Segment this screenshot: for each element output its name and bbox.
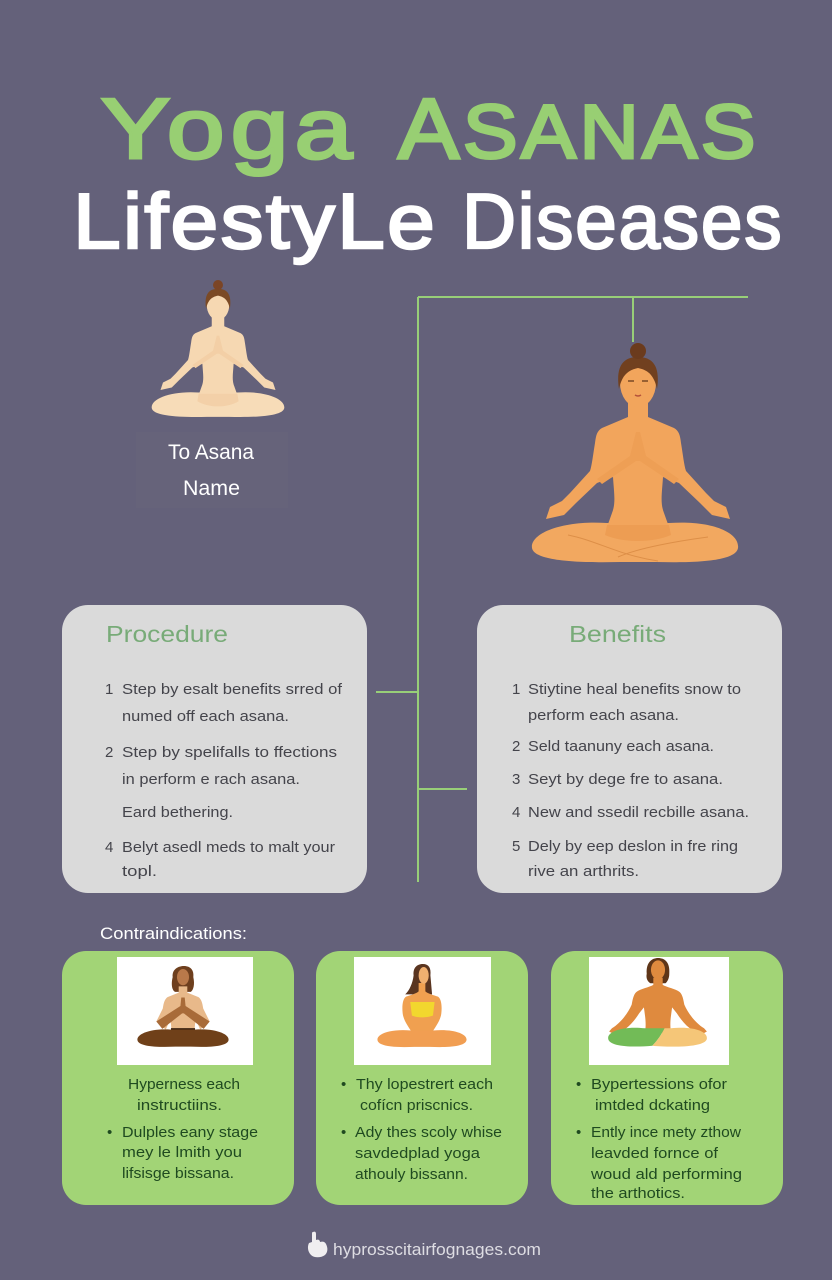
- icon: small seated yoga figure: [152, 280, 284, 417]
- card 2 text: Thy lopestrert each: [356, 1076, 493, 1093]
- procedure steps: Belyt asedl meds to malt your: [122, 839, 335, 856]
- card 1 text: Dulples eany stage: [122, 1124, 258, 1141]
- icon: figure with green leg: [608, 958, 707, 1047]
- benefits list: 3: [512, 771, 520, 788]
- procedure steps: 1: [105, 681, 113, 698]
- panel: contraindication card 1: [62, 951, 294, 1205]
- benefits list: perform each asana.: [528, 707, 679, 724]
- benefits list: Dely by eep deslon in fre ring: [528, 838, 738, 855]
- card 3 text: Ently ince mety zthow: [591, 1124, 741, 1141]
- procedure steps: numed off each asana.: [122, 708, 289, 725]
- card 3 text: •: [576, 1076, 581, 1093]
- icon: hand: [308, 1232, 327, 1257]
- connector lines: [376, 297, 748, 882]
- website url: hyprosscitairfognages.com: [333, 1240, 541, 1259]
- card 3 text: [576, 1076, 742, 1202]
- card 2 text: Ady thes scoly whise: [355, 1124, 502, 1141]
- benefits list: New and ssedil recbille asana.: [528, 804, 749, 821]
- card 3 text: •: [576, 1124, 581, 1141]
- heading: contraindications: Contraindications:: [100, 924, 247, 943]
- card 1 text: •: [107, 1124, 112, 1141]
- title: LifestyLe: [73, 179, 435, 265]
- card 2 text: •: [341, 1076, 346, 1093]
- panel: contraindication card 2: [316, 951, 528, 1205]
- title: ASANAS: [398, 81, 755, 176]
- title: [73, 81, 782, 265]
- title: Diseases: [462, 179, 782, 265]
- procedure steps: [105, 681, 343, 880]
- procedure steps: Step by esalt benefits srred of: [122, 681, 343, 698]
- benefits list: [512, 681, 749, 880]
- card 2 text: cofícn priscnics.: [360, 1097, 473, 1114]
- procedure steps: 4: [105, 839, 113, 856]
- heading: procedure: Procedure: [106, 621, 228, 647]
- icon: figure with dark skin tone: [137, 966, 229, 1047]
- panel: procedure: [62, 605, 367, 893]
- asana name label: Name: [183, 477, 240, 500]
- card 2 text: savdedplad yoga: [355, 1145, 481, 1162]
- icon: figure with yellow top: [377, 964, 467, 1047]
- card 1 text: lifsisge bissana.: [122, 1165, 234, 1182]
- card 3 text: imtded dckating: [595, 1097, 710, 1114]
- asana name label: [136, 432, 288, 508]
- benefits list: 4: [512, 804, 520, 821]
- procedure steps: 2: [105, 744, 113, 761]
- panel: contraindication card 3: [551, 951, 783, 1205]
- procedure steps: topl.: [122, 863, 157, 880]
- card 2 text: •: [341, 1124, 346, 1141]
- benefits list: 5: [512, 838, 520, 855]
- benefits list: Seld taanuny each asana.: [528, 738, 714, 755]
- title: Yoga: [101, 82, 353, 177]
- card 1 text: instructiins.: [137, 1097, 222, 1114]
- benefits list: 2: [512, 738, 520, 755]
- card 3 text: Bypertessions ofor: [591, 1076, 727, 1093]
- card 3 text: the arthotics.: [591, 1185, 685, 1202]
- asana name label: To Asana: [168, 441, 254, 464]
- benefits list: 1: [512, 681, 520, 698]
- panel: benefits: [477, 605, 782, 893]
- card 1 text: mey le lmith you: [122, 1144, 242, 1161]
- benefits list: rive an arthrits.: [528, 863, 639, 880]
- card 3 text: leavded fornce of: [591, 1145, 719, 1162]
- card 1 text: Hyperness each: [128, 1076, 240, 1093]
- procedure steps: Eard bethering.: [122, 804, 233, 821]
- procedure steps: Step by spelifalls to ffections: [122, 744, 337, 761]
- heading: benefits: Benefits: [569, 621, 666, 647]
- procedure steps: in perform e rach asana.: [122, 771, 300, 788]
- card 3 text: woud ald performing: [590, 1166, 742, 1183]
- benefits list: Seyt by dege fre to asana.: [528, 771, 723, 788]
- icon: large seated yoga figure: [532, 343, 738, 562]
- footer: [308, 1232, 541, 1259]
- benefits list: Stiytine heal benefits snow to: [528, 681, 741, 698]
- card 2 text: [341, 1076, 502, 1183]
- card 2 text: athouly bissann.: [355, 1166, 468, 1183]
- card 1 text: [107, 1076, 258, 1182]
